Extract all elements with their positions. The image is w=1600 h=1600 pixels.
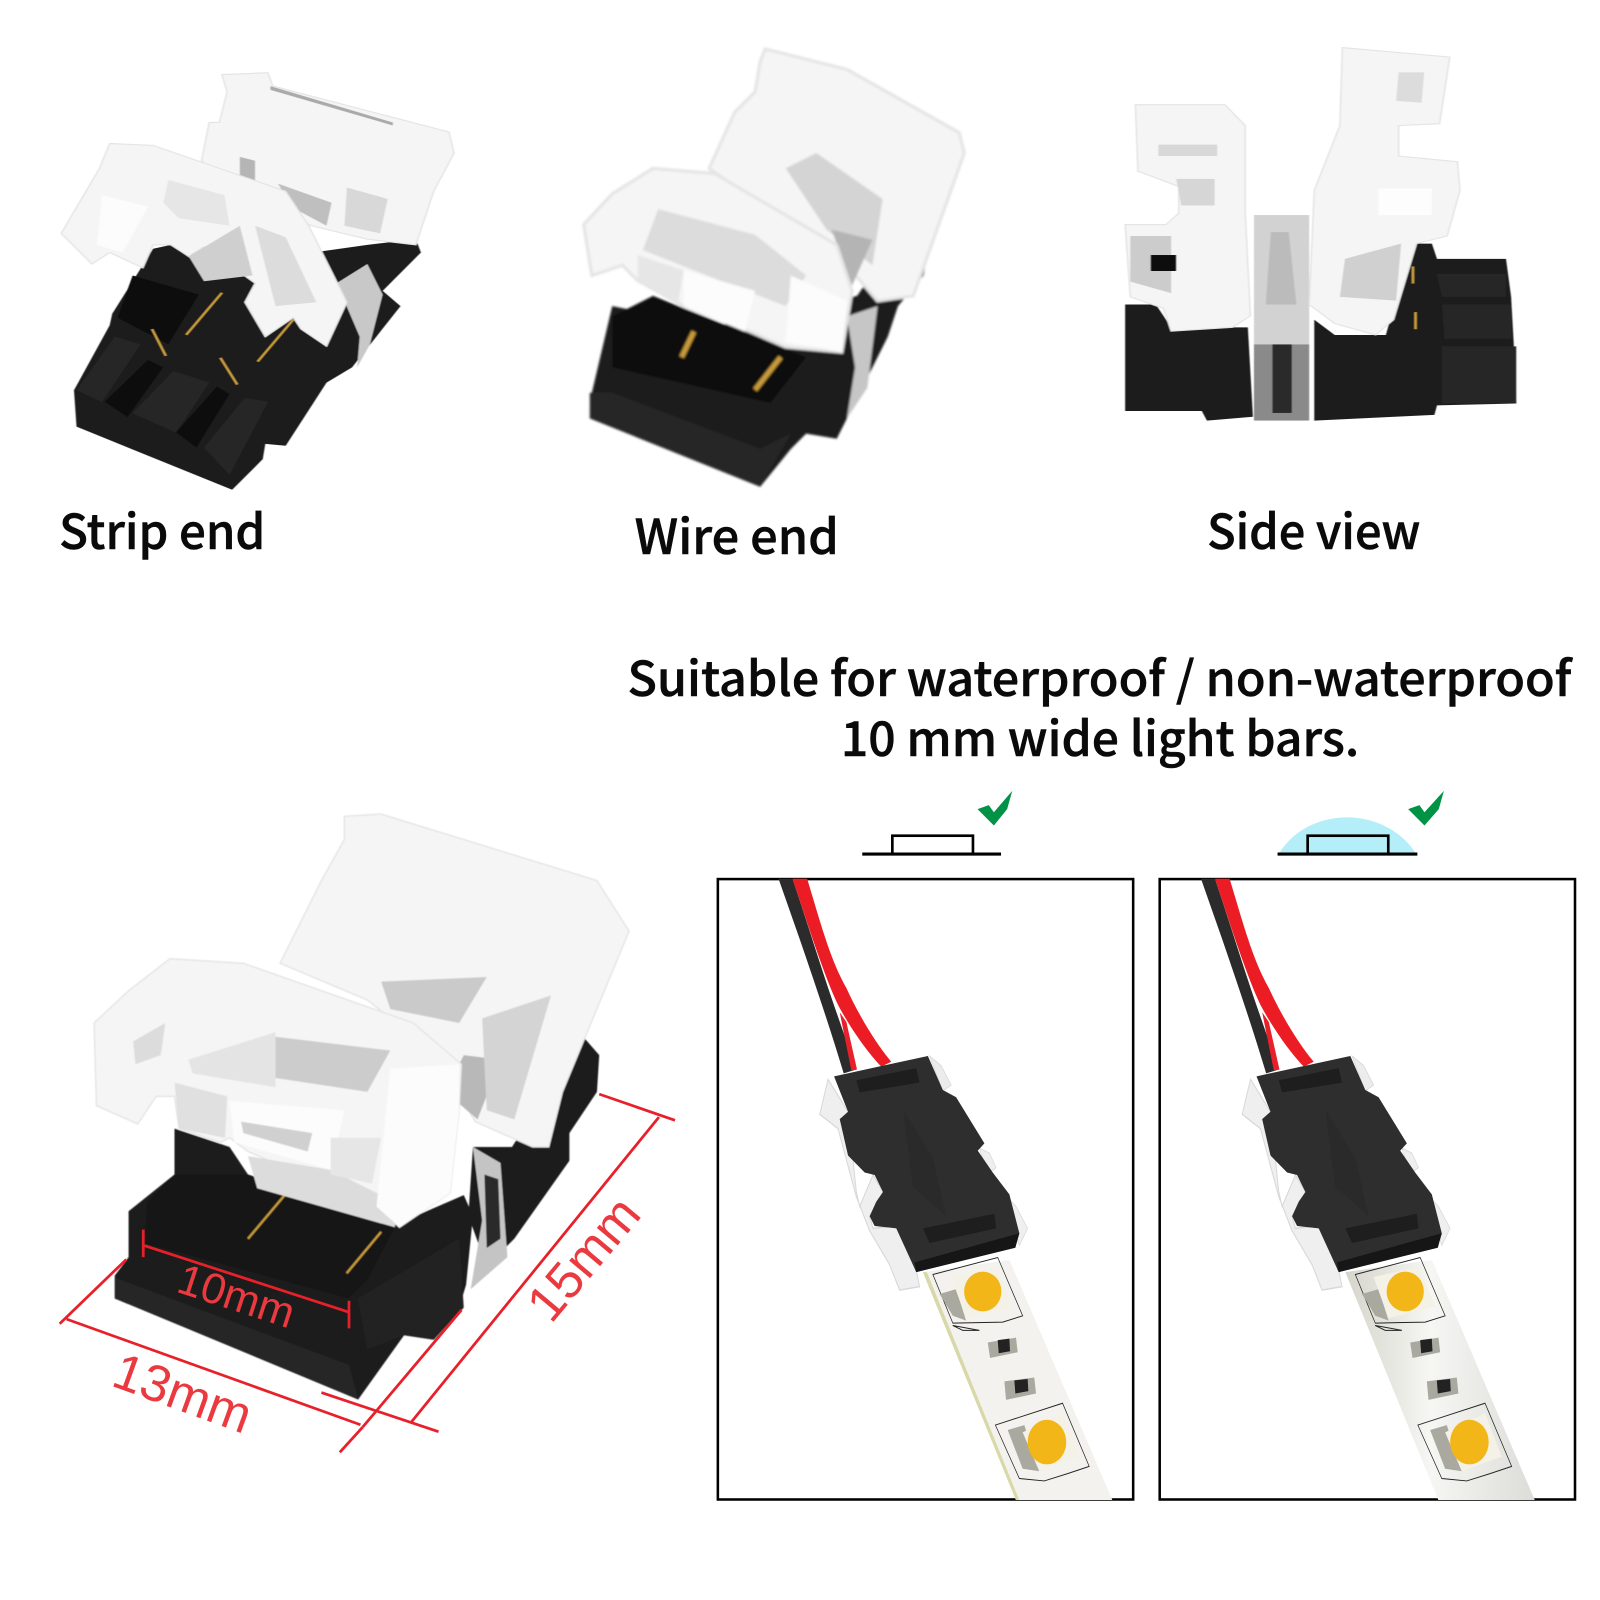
product photo: side view connector [1125, 48, 1516, 421]
clear left clip [1125, 105, 1250, 331]
heading: suitable light bars: Suitable for waterproof / non-waterproof [628, 640, 1574, 710]
clear right clip [1309, 48, 1460, 335]
10mm dimension: 10mm [172, 1255, 301, 1338]
15mm dimension [363, 1094, 675, 1427]
centre hinge [1254, 215, 1309, 348]
icon: domed waterproof strip profile with check [1278, 791, 1444, 854]
black rear housing [468, 1037, 599, 1266]
clear rear clip [709, 49, 964, 301]
label: Wire end: Wire end [635, 498, 839, 568]
label: Strip end: Strip end [59, 493, 265, 563]
clear rear clip [280, 814, 629, 1147]
dimensioned connector photo [60, 814, 675, 1452]
heading: suitable light bars [628, 640, 1574, 770]
15mm dimension: 15mm [515, 1185, 651, 1332]
LED strip tape [779, 879, 1112, 1500]
black front housing [115, 1129, 473, 1399]
black connector base [74, 239, 421, 490]
clear front clip [61, 143, 347, 346]
contact pins [248, 1195, 381, 1273]
connector body [94, 814, 629, 1399]
contact pins [152, 293, 293, 385]
13mm dimension: 13mm [106, 1341, 260, 1444]
contact pins [1413, 266, 1416, 329]
13mm dimension [60, 1259, 439, 1452]
black connector base [590, 214, 934, 487]
product photo: strip end connector [61, 73, 454, 490]
clear rear clip [202, 73, 454, 245]
label: Side view: Side view [1207, 493, 1420, 563]
LED strip tape with coating [1201, 879, 1535, 1500]
black housing [1125, 304, 1253, 421]
icon: flat strip profile with check [862, 791, 1012, 854]
product photo: wire end connector [584, 49, 964, 487]
contact pins [682, 332, 781, 390]
panel: non-waterproof strip photo [718, 879, 1133, 1500]
clear front clip [584, 168, 852, 352]
heading: suitable light bars: 10 mm wide light bars. [841, 700, 1359, 770]
clear front clip [94, 959, 461, 1227]
panel: waterproof strip photo [1160, 879, 1575, 1500]
10mm dimension [143, 1230, 349, 1338]
